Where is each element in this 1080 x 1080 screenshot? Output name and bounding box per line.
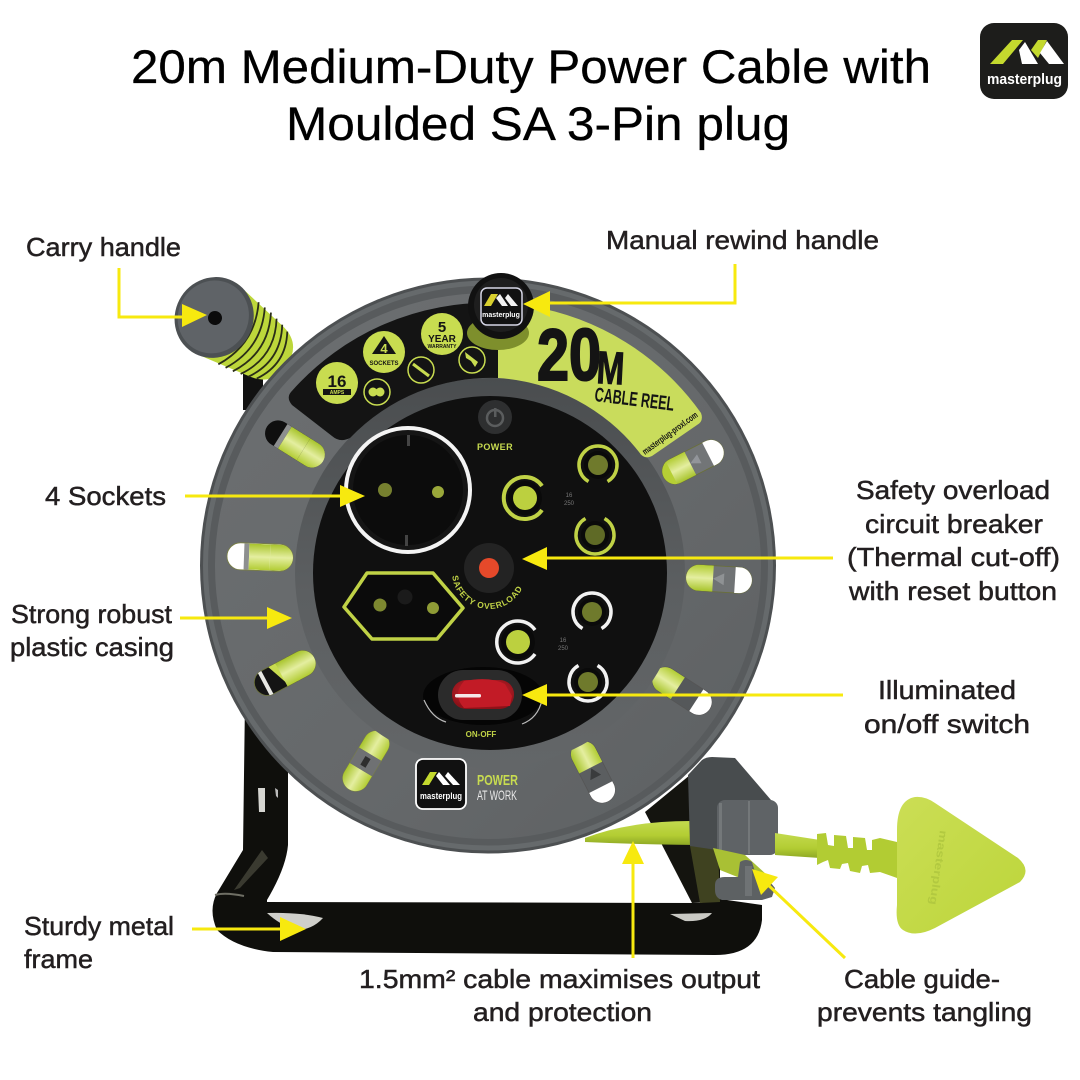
power at work badge: masterplug bbox=[420, 791, 462, 801]
label: illuminated on/off switch: Illuminated bbox=[878, 675, 1016, 705]
icon: 5 year warranty: YEAR bbox=[428, 334, 457, 345]
hub ring bbox=[295, 378, 685, 768]
lime plug and cord: masterplug bbox=[927, 830, 949, 906]
label: cable guide prevents tangling bbox=[752, 869, 1032, 1027]
hexagonal socket: lime outline bbox=[344, 573, 463, 639]
label: safety overload circuit breaker: Safety overload bbox=[856, 475, 1050, 505]
cable slots bbox=[227, 415, 754, 808]
icon: 16 amps: 16 bbox=[328, 372, 346, 391]
power at work badge: AT WORK bbox=[477, 787, 517, 803]
title: 20m Medium-Duty Power Cable with bbox=[131, 40, 931, 93]
label: manual rewind handle bbox=[523, 225, 879, 317]
cable behind reel bbox=[585, 821, 720, 845]
round socket: white ring bbox=[346, 428, 470, 552]
label: illuminated on/off switch: on/off switch bbox=[864, 709, 1030, 739]
title: Moulded SA 3-Pin plug bbox=[286, 97, 790, 150]
lime sticker: 20M cable reel: M bbox=[595, 343, 626, 395]
black sticker with feature icons bbox=[289, 303, 498, 440]
reel drum bbox=[200, 273, 776, 854]
icon: drill bbox=[459, 347, 485, 373]
grey end cap bbox=[159, 262, 269, 373]
label: manual rewind handle: Manual rewind handle bbox=[606, 225, 879, 255]
label: illuminated on/off switch bbox=[522, 675, 1030, 739]
label: cable maximises output: 1.5mm² cable maximises output bbox=[359, 964, 761, 994]
power button: POWER bbox=[477, 442, 513, 452]
label: strong robust plastic casing: plastic casing bbox=[10, 632, 174, 662]
masterplug logo: masterplug bbox=[987, 71, 1062, 88]
label: safety overload circuit breaker: circuit breaker bbox=[865, 509, 1043, 539]
label: cable maximises output bbox=[359, 841, 761, 1027]
label: strong robust plastic casing bbox=[10, 599, 292, 662]
icon: 5 year warranty bbox=[421, 313, 463, 355]
ribbed lime grip bbox=[193, 284, 309, 399]
label: safety overload circuit breaker bbox=[522, 475, 1060, 606]
label: strong robust plastic casing: Strong robust bbox=[11, 599, 173, 629]
label: carry handle: Carry handle bbox=[26, 232, 181, 262]
icon: 4 sockets bbox=[363, 331, 405, 373]
rewind knob bbox=[467, 273, 534, 350]
label: 4 sockets bbox=[45, 481, 365, 511]
label: cable maximises output: and protection bbox=[473, 997, 652, 1027]
rewind knob: masterplug bbox=[482, 312, 520, 319]
label: safety overload circuit breaker: (Thermal cut-off) bbox=[847, 542, 1060, 572]
illuminated on/off switch: ON-OFF bbox=[466, 730, 496, 739]
icon: 16 amps: AMPS bbox=[330, 390, 345, 396]
power at work badge bbox=[416, 759, 518, 809]
lime plug and cord bbox=[775, 797, 1026, 934]
label: sturdy metal frame: frame bbox=[24, 944, 93, 974]
label: carry handle bbox=[26, 232, 207, 327]
power at work badge: POWER bbox=[477, 772, 518, 789]
black disc bbox=[313, 396, 667, 750]
metal frame bbox=[212, 372, 762, 955]
lime three-pin socket rings: 250 bbox=[564, 501, 575, 507]
control panel bbox=[313, 396, 667, 750]
icon: hedge trimmer bbox=[408, 357, 434, 383]
icon: vacuum bbox=[364, 379, 390, 405]
illuminated on/off switch bbox=[423, 667, 543, 739]
icon: 16 amps bbox=[316, 362, 358, 404]
lime sticker: 20M cable reel: 20 bbox=[537, 313, 601, 396]
label: sturdy metal frame: Sturdy metal bbox=[24, 911, 174, 941]
cable guide bracket and plug holder bbox=[688, 757, 778, 900]
label: sturdy metal frame bbox=[24, 911, 306, 974]
safety overload reset button bbox=[452, 543, 522, 609]
white three-pin socket rings: 250 bbox=[558, 646, 569, 652]
label: cable guide prevents tangling: prevents tangling bbox=[817, 997, 1032, 1027]
label: safety overload circuit breaker: with reset button bbox=[848, 576, 1057, 606]
icon: 5 year warranty: WARRANTY bbox=[428, 344, 457, 350]
icon: 4 sockets: 4 bbox=[380, 341, 388, 356]
power button bbox=[477, 400, 513, 452]
lime three-pin socket rings: 16 bbox=[566, 493, 573, 499]
carry handle bbox=[159, 262, 309, 399]
lime sticker: 20M cable reel: CABLE REEL bbox=[593, 384, 675, 416]
icon: 4 sockets: SOCKETS bbox=[369, 361, 399, 367]
icon: 5 year warranty: 5 bbox=[438, 319, 446, 336]
masterplug logo bbox=[980, 23, 1068, 99]
lime three-pin socket rings bbox=[504, 446, 617, 554]
label: cable guide prevents tangling: Cable guide- bbox=[844, 964, 1000, 994]
title bbox=[131, 40, 931, 150]
white three-pin socket rings bbox=[497, 593, 611, 701]
lime sticker: 20M cable reel bbox=[498, 306, 702, 457]
lime sticker: 20M cable reel: masterplug-proxl.com bbox=[640, 410, 700, 457]
safety overload reset button: SAFETY OVERLOAD bbox=[452, 576, 522, 609]
white three-pin socket rings: 16 bbox=[560, 638, 567, 644]
label: 4 sockets: 4 Sockets bbox=[45, 481, 166, 511]
outer ring bbox=[200, 278, 776, 854]
